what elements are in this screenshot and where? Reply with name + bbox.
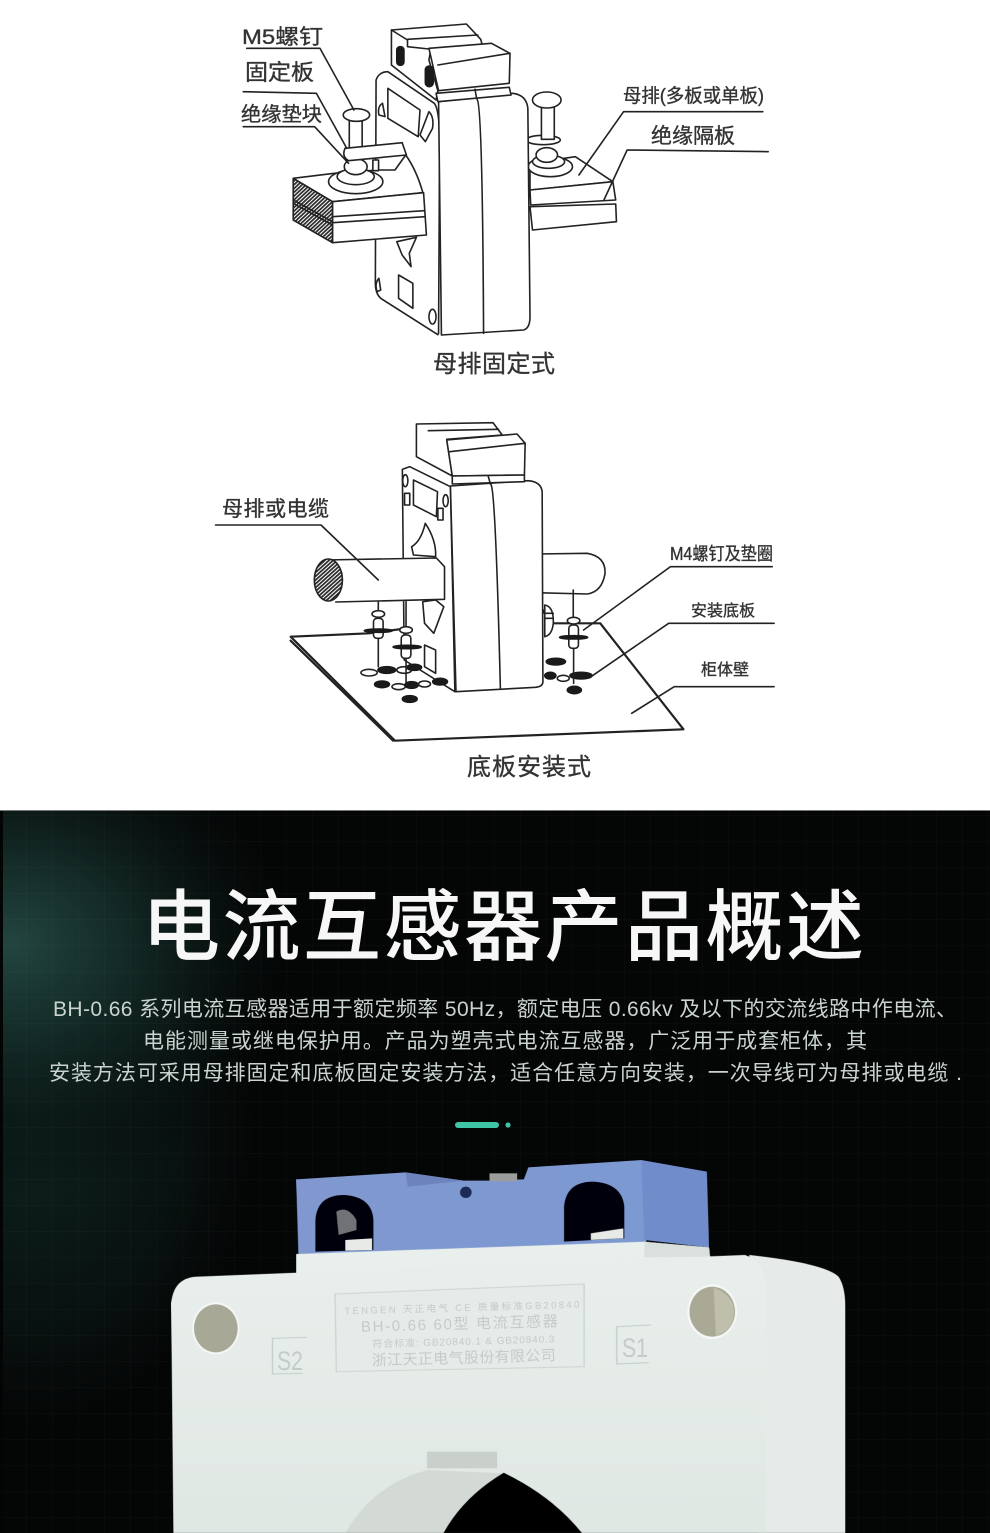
title: 电流互感器产品概述 bbox=[142, 883, 864, 971]
terminal holes bbox=[315, 1195, 373, 1252]
background: white upper area bbox=[0, 0, 990, 811]
leaders bbox=[216, 525, 378, 580]
label: cabinet wall: 柜体壁 bbox=[701, 660, 749, 679]
embossed nameplate text: 浙江天正电气股份有限公司 bbox=[372, 1347, 556, 1369]
aperture bbox=[345, 1470, 504, 1533]
right cable bbox=[536, 553, 605, 594]
body text: BH-0.66 系列电流互感器适用于额定频率 50Hz，额定电压 0.66kv 及以下的交流线路中作电流、 bbox=[53, 998, 957, 1021]
main front body bbox=[439, 93, 530, 335]
embossed S2 mark: S2 bbox=[277, 1346, 303, 1376]
bracket coil bbox=[545, 605, 553, 637]
front of housing bbox=[171, 1255, 766, 1533]
panel: dark product overview bbox=[0, 810, 990, 1533]
lower details bbox=[397, 237, 416, 267]
label: insulating pad: 绝缘垫块 bbox=[241, 103, 322, 126]
drawing: transformer on base plate bbox=[216, 423, 774, 741]
mounting holes bbox=[192, 1302, 239, 1354]
embossed nameplate text: TENGEN 天正电气 CE 质量标准GB20840 bbox=[344, 1299, 580, 1317]
body text: 安装方法可采用母排固定和底板固定安装方法，适合任意方向安装，一次导线可为母排或电缆 . bbox=[49, 1062, 962, 1085]
label: insulating separator: 绝缘隔板 bbox=[651, 125, 735, 148]
label: M5 screw: M5螺钉 bbox=[242, 26, 323, 49]
label: M4 screw and washer: M4螺钉及垫圈 bbox=[670, 544, 773, 564]
top terminal blocks bbox=[416, 423, 502, 476]
caption: busbar-fixed type: 母排固定式 bbox=[433, 351, 555, 378]
label: busbar: 母排(多板或单板) bbox=[623, 85, 764, 107]
side plate bbox=[375, 72, 440, 335]
right busbar lower, behind body bbox=[530, 204, 616, 230]
label: fixing plate: 固定板 bbox=[245, 60, 314, 85]
embossed marks bbox=[273, 1337, 307, 1374]
aperture tab bbox=[427, 1452, 497, 1468]
right side of housing bbox=[749, 1255, 845, 1533]
left busbar bbox=[293, 155, 423, 202]
main body bbox=[450, 481, 543, 692]
white collar bbox=[296, 1242, 710, 1273]
embossed nameplate text bbox=[344, 1299, 581, 1370]
base plate bbox=[291, 610, 683, 741]
screws bbox=[364, 602, 588, 683]
caption: base-plate type: 底板安装式 bbox=[467, 754, 591, 781]
dark background with glow and grid bbox=[0, 810, 990, 1533]
product photo: current transformer bbox=[171, 1160, 845, 1533]
side plate bbox=[402, 467, 455, 692]
embossed plate bbox=[335, 1284, 584, 1372]
embossed nameplate text: BH-0.66 60型 电流互感器 bbox=[361, 1313, 558, 1336]
holes bbox=[361, 658, 592, 702]
embossed nameplate text: 符合标准: GB20840.1 & GB20840.3 bbox=[372, 1332, 555, 1350]
label: mounting base plate: 安装底板 bbox=[691, 602, 755, 620]
top terminal blocks bbox=[391, 24, 482, 100]
embossed S1 mark: S1 bbox=[622, 1333, 648, 1363]
panel: base-plate mounting diagram bbox=[216, 423, 774, 781]
drawing: transformer on busbar bbox=[243, 24, 768, 335]
label: busbar or cable: 母排或电缆 bbox=[222, 498, 329, 521]
blue terminal cover bbox=[296, 1160, 647, 1255]
panel: busbar-fixed mounting diagram bbox=[241, 24, 768, 378]
left cable bbox=[328, 558, 445, 602]
accent divider bbox=[455, 1122, 511, 1128]
body text: 电能测量或继电保护用。产品为塑壳式电流互感器，广泛用于成套柜体，其 bbox=[143, 1030, 867, 1053]
leaders bbox=[247, 48, 354, 110]
body text bbox=[49, 998, 962, 1085]
